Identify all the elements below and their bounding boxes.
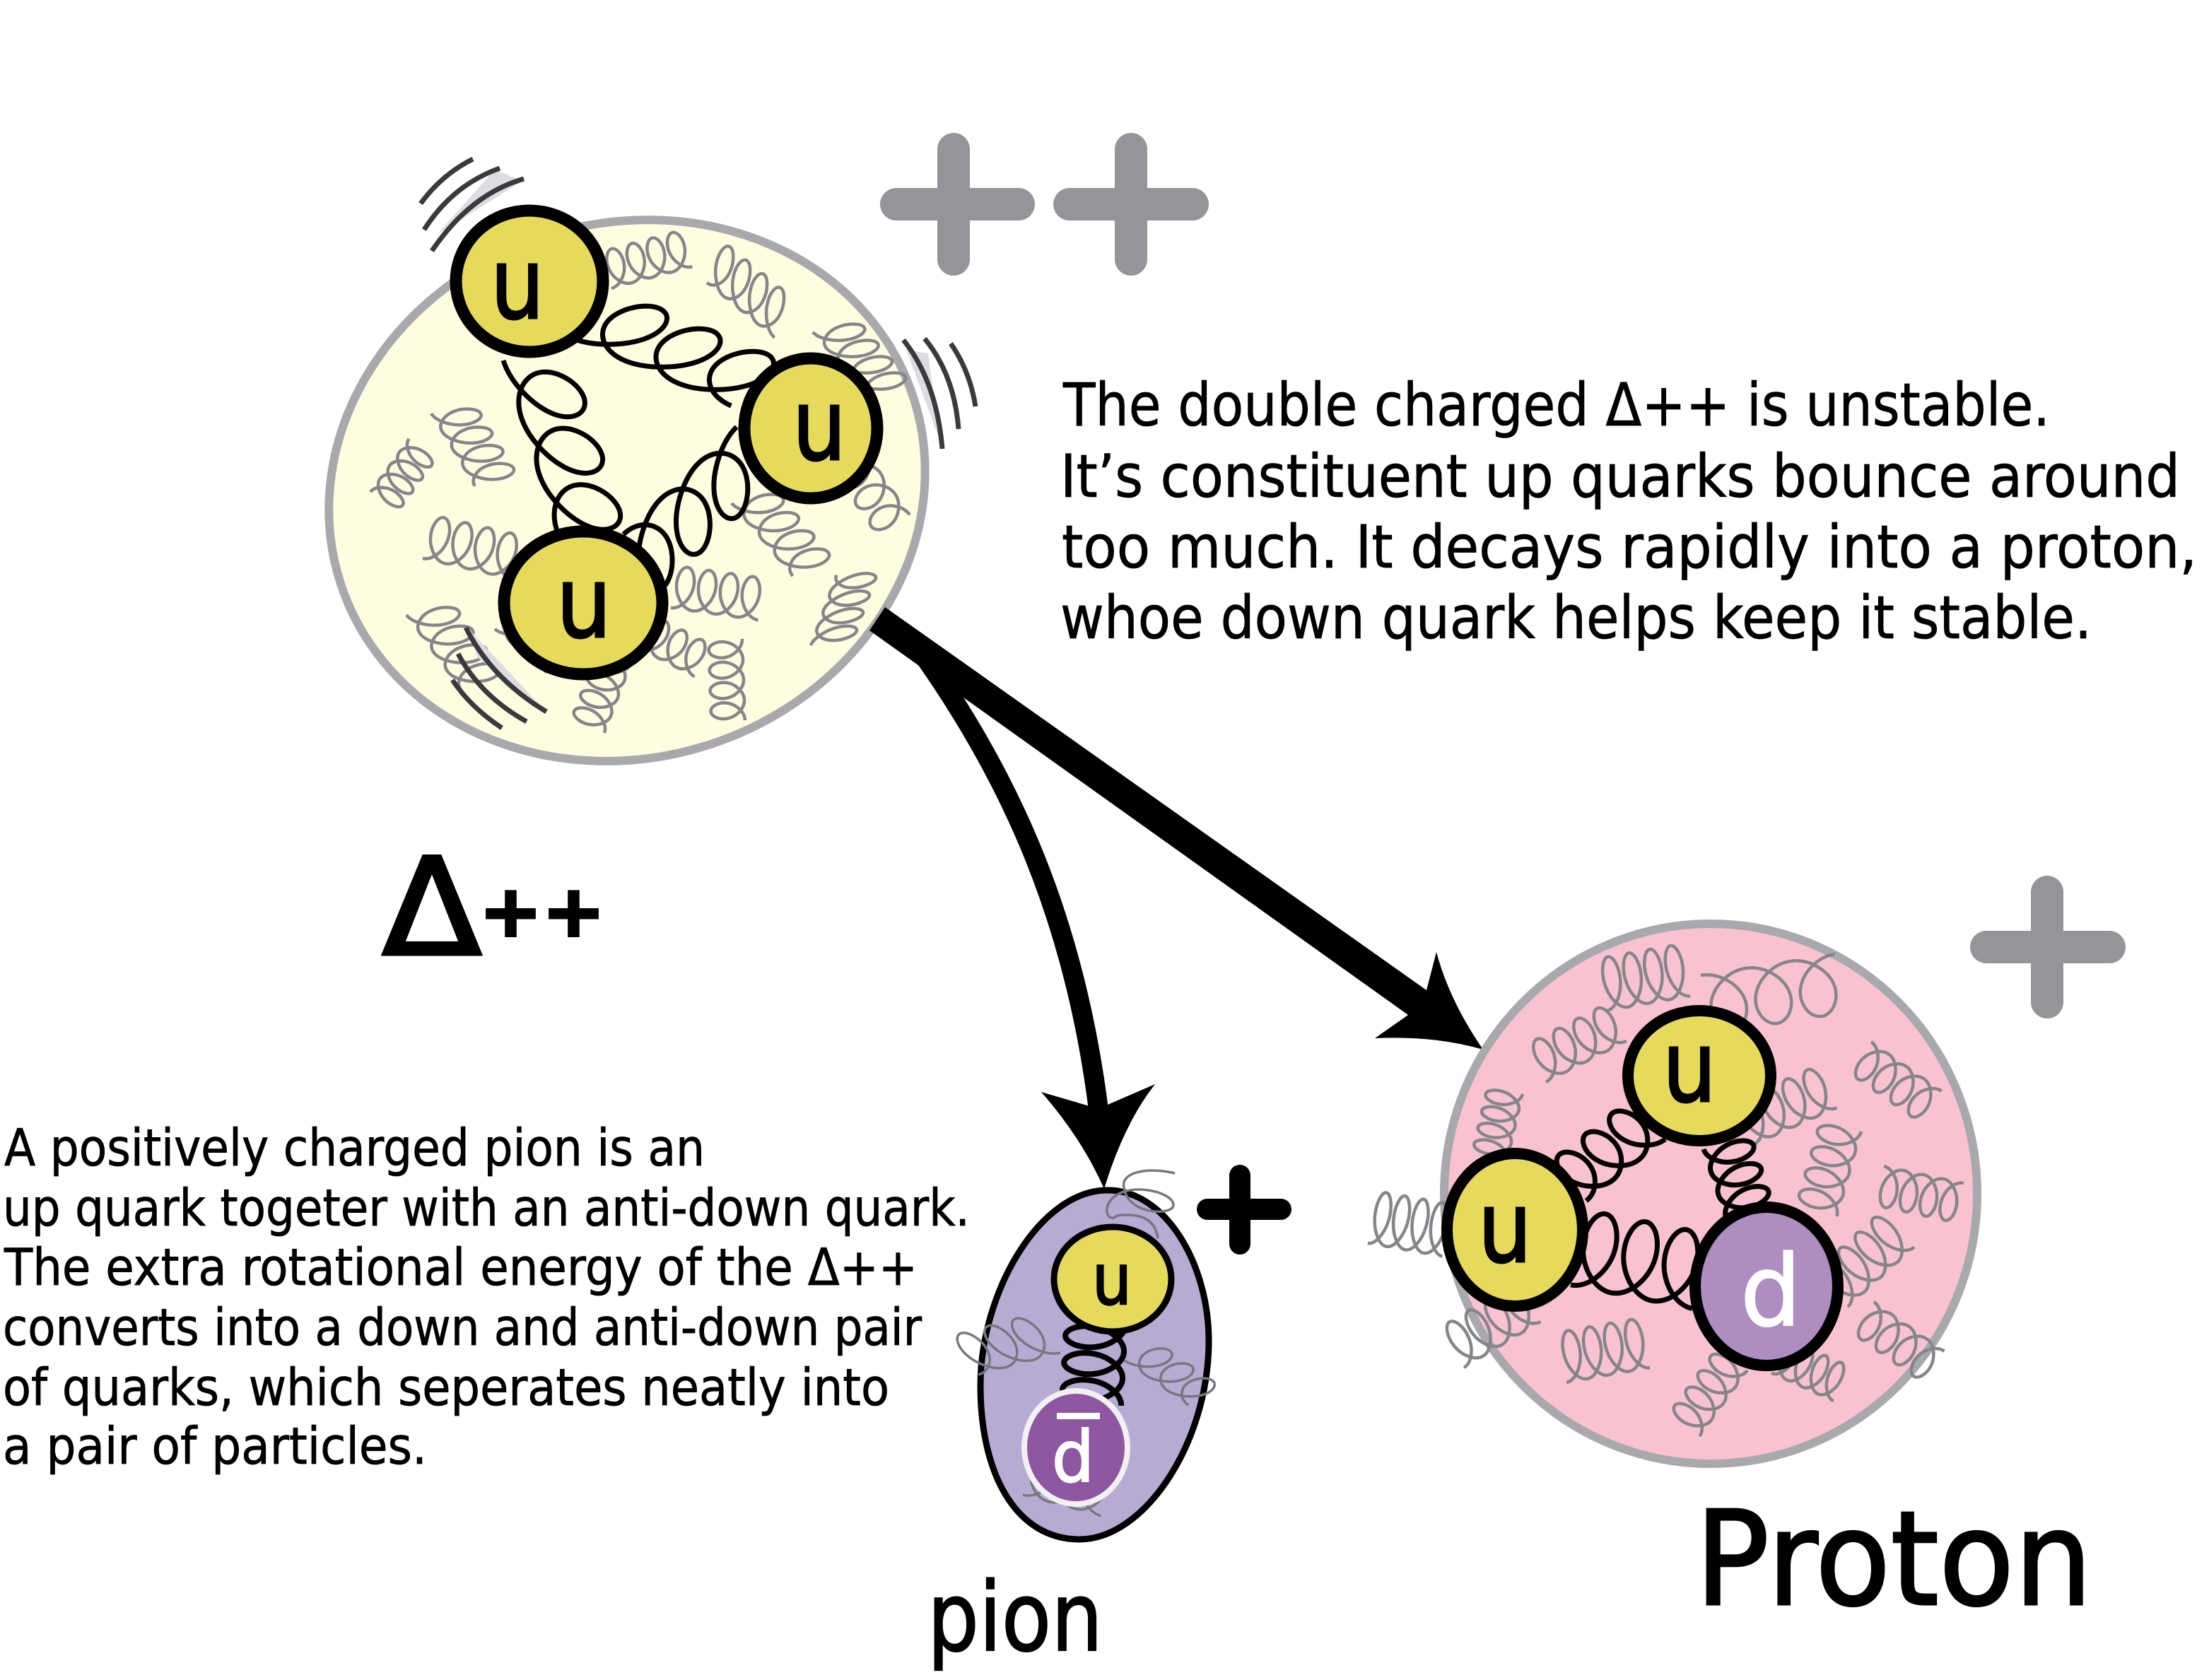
- up quark bottom: u: [556, 546, 611, 660]
- double plus charge symbol: [896, 149, 1193, 259]
- delta label: Δ: [382, 830, 481, 986]
- explanation text: delta instability: The double charged Δ++ is unstable.: [1062, 370, 2050, 440]
- particle: pion: [948, 1170, 1223, 1539]
- pion body: [980, 1190, 1209, 1539]
- up quark in pion: u: [1092, 1238, 1132, 1321]
- strong-force gluon springs in delta: [503, 297, 792, 605]
- explanation text: delta instability: whoe down quark helps keep it stable.: [1060, 583, 2092, 652]
- background gluons in proton: [1368, 944, 1964, 1436]
- arrow: delta to pion: [919, 649, 1155, 1189]
- explanation text: pion: of quarks, which seperates neatly into: [3, 1358, 889, 1417]
- pion plus charge: [1207, 1175, 1281, 1244]
- delta body: [258, 143, 996, 838]
- explanation text: pion: [3, 1118, 970, 1476]
- up quark in pion: [1054, 1227, 1171, 1332]
- particle: proton: [1368, 924, 1977, 1464]
- vibration marks: right quark: [903, 339, 976, 449]
- up quark right: u: [792, 368, 846, 483]
- proton plus charge: [1986, 892, 2109, 1002]
- up quark top: [1628, 1010, 1771, 1141]
- up quark top: u: [1663, 1010, 1716, 1124]
- delta label: ++: [479, 870, 605, 953]
- background gluons in pion: [948, 1170, 1223, 1516]
- up quark right: [744, 358, 877, 498]
- up quark left: u: [1478, 1170, 1532, 1285]
- explanation text: pion: up quark togeter with an anti-down quark.: [3, 1178, 970, 1238]
- arrow: delta to proton: [869, 607, 1483, 1050]
- down quark: [1695, 1207, 1838, 1365]
- gluon spring in pion: [1062, 1322, 1125, 1406]
- proton label: Proton: [1695, 1483, 2092, 1635]
- vibration marks: bottom quark: [452, 628, 546, 728]
- explanation text: pion: The extra rotational energy of the Δ++: [4, 1238, 918, 1297]
- explanation text: pion: A positively charged pion is an: [4, 1118, 705, 1177]
- explanation text: delta instability: [1060, 370, 2197, 652]
- background gluons in delta: [370, 230, 912, 733]
- delta label: [382, 830, 605, 986]
- gluon springs in proton: [1547, 1103, 1772, 1308]
- up quark top-left: [456, 211, 603, 352]
- anti-down quark in pion: d: [1052, 1416, 1094, 1498]
- proton body: [1444, 924, 1977, 1464]
- vibration marks: top-left quark: [421, 159, 524, 251]
- down quark: d: [1740, 1234, 1801, 1349]
- up quark top-left: u: [491, 227, 544, 341]
- up quark left: [1447, 1153, 1583, 1306]
- explanation text: pion: converts into a down and anti-down pair: [3, 1298, 922, 1357]
- anti-down quark in pion: [1024, 1391, 1127, 1504]
- particle: Delta++ baryon: [258, 143, 996, 838]
- explanation text: pion: a pair of particles.: [3, 1416, 427, 1476]
- pion label: pion: [927, 1562, 1103, 1673]
- up quark bottom: [504, 531, 662, 674]
